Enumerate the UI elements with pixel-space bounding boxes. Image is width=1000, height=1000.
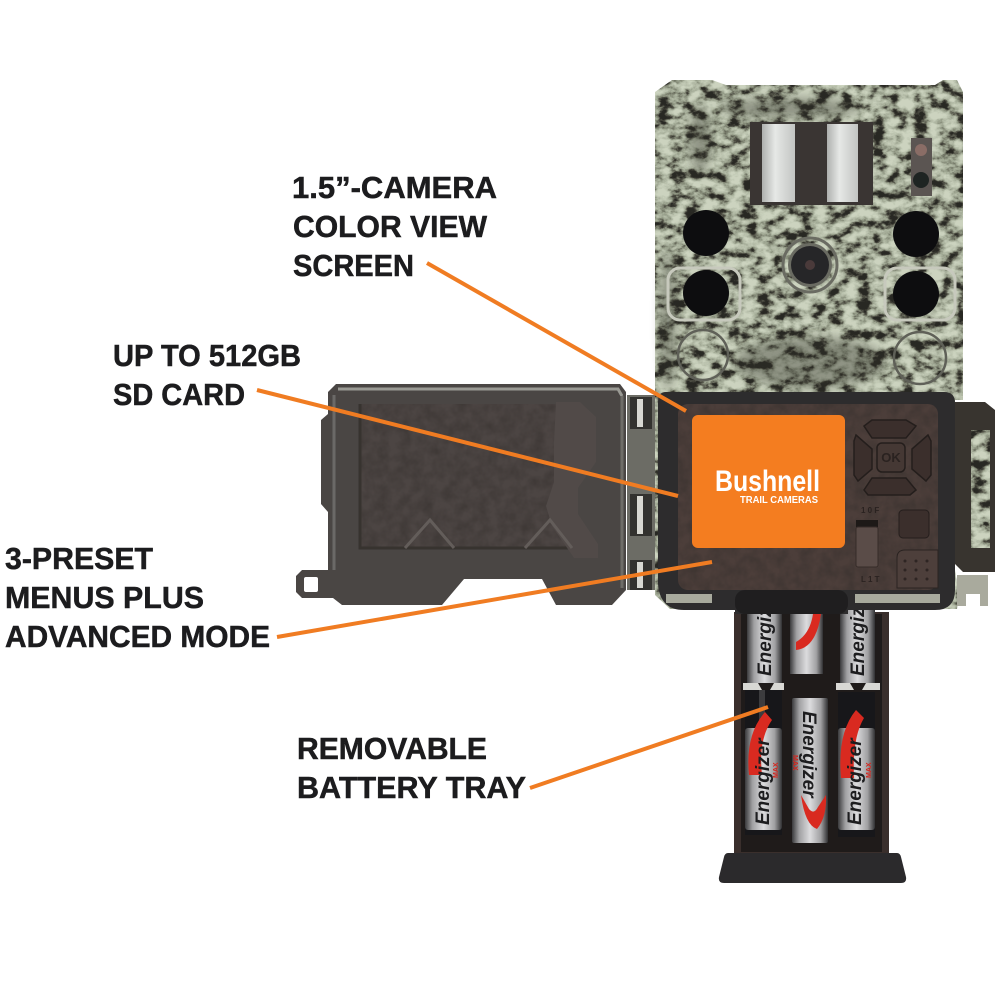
- PIR motion sensor window: [750, 122, 873, 205]
- mode switch: [856, 506, 880, 584]
- camera lens: [783, 238, 837, 292]
- panel: control panel housing: [658, 392, 955, 614]
- arrow: battery tray callout line: [530, 707, 768, 788]
- mode switch: L 1 T: [861, 575, 880, 584]
- bottom left battery: MAX: [773, 762, 780, 778]
- tray base: [719, 853, 906, 883]
- contacts between batteries: [743, 683, 880, 690]
- bottom centre battery: [791, 698, 828, 843]
- d-pad buttons: [854, 420, 931, 495]
- bark shading: [660, 98, 885, 390]
- bottom centre battery: Energizer: [798, 711, 819, 799]
- arrow: SD card callout line: [257, 390, 678, 496]
- top row batteries: Energizer: [755, 588, 776, 676]
- top row batteries: [747, 588, 875, 683]
- text: SD card label: SD CARD: [113, 377, 245, 412]
- bottom left battery: Energizer: [753, 737, 774, 825]
- text: screen label: SCREEN: [293, 248, 414, 283]
- menu button: [899, 510, 929, 538]
- text: screen label: COLOR VIEW: [293, 209, 488, 244]
- bottom centre battery: MAX: [791, 755, 798, 771]
- text: menus label: MENUS PLUS: [5, 580, 204, 615]
- panel: camouflage camera body: [655, 80, 963, 609]
- text: battery tray label: [297, 731, 526, 805]
- brand sticker: Bushnell: [715, 465, 820, 498]
- bottom right battery: Energizer: [845, 737, 866, 825]
- LED housings: [668, 268, 955, 320]
- door lug: [304, 577, 318, 592]
- text: menus label: ADVANCED MODE: [5, 619, 270, 654]
- tray release knob: [735, 590, 848, 614]
- d-pad buttons: OK: [881, 450, 901, 465]
- text: menus label: [5, 541, 270, 654]
- bottom right battery: MAX: [866, 762, 873, 778]
- top row batteries: Energizer: [848, 588, 869, 676]
- text: SD card label: [113, 338, 301, 412]
- lower round sensors: [678, 330, 946, 384]
- text: screen label: 1.5”-CAMERA: [292, 170, 497, 205]
- icon: door hinges: [627, 395, 655, 590]
- panel: removable battery tray: [719, 588, 906, 883]
- text: battery tray label: REMOVABLE: [297, 731, 487, 766]
- speaker grille: [897, 550, 938, 588]
- brand sticker: [692, 415, 845, 548]
- text: screen label: [292, 170, 497, 283]
- IR LED arrays: [683, 210, 939, 317]
- camouflage strips below panel: [666, 594, 940, 603]
- mode switch: 1 0 F: [861, 506, 879, 515]
- small indicator sensors: [911, 138, 932, 196]
- text: SD card label: UP TO 512GB: [113, 338, 301, 373]
- panel: side latch: [955, 402, 995, 606]
- panel: opened camera door: [296, 384, 626, 605]
- arrow: screen callout line: [427, 263, 686, 411]
- text: battery tray label: BATTERY TRAY: [297, 770, 526, 805]
- bottom left battery: [745, 690, 782, 835]
- text: menus label: 3-PRESET: [5, 541, 153, 576]
- bottom right battery: [838, 692, 875, 837]
- arrow: menus callout line: [277, 562, 712, 637]
- brand sticker: TRAIL CAMERAS: [740, 495, 818, 506]
